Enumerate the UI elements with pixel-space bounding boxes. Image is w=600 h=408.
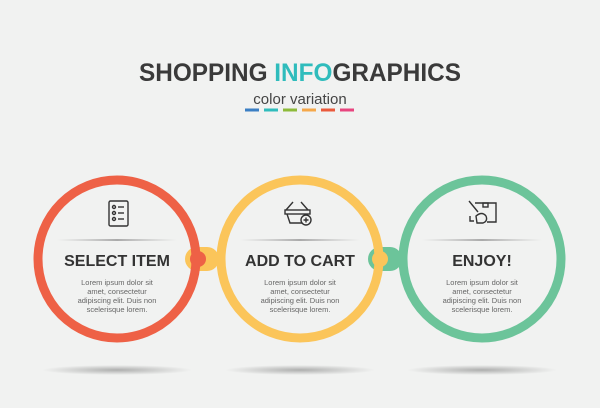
icon: list [109,201,128,226]
panel: add to cart: ADD TO CART [245,253,355,270]
panel: enjoy: adipiscing elit. Duis non [443,296,521,305]
connector: yellow-green [368,247,402,271]
connector: red-yellow [185,247,219,271]
panel: add to cart [221,180,379,338]
shadows [42,365,557,375]
panel: select item [38,180,196,338]
panel: select item: scelerisque lorem. [87,305,147,314]
panel: add to cart: scelerisque lorem. [270,305,330,314]
panel: add to cart: Lorem ipsum dolor sit [264,278,337,287]
panel: select item: adipiscing elit. Duis non [78,296,156,305]
icon: basket [285,202,311,225]
title: SHOPPING INFOGRAPHICS [139,59,461,87]
panel: select item: Lorem ipsum dolor sit [81,278,154,287]
panel: select item: SELECT ITEM [64,253,170,270]
panel: enjoy: scelerisque lorem. [452,305,512,314]
panel: select item: amet, consectetur [87,287,147,296]
panel: enjoy [403,180,561,338]
color dashes [245,108,354,112]
panel: enjoy: amet, consectetur [452,287,512,296]
panel: add to cart: adipiscing elit. Duis non [261,296,339,305]
panel: add to cart: amet, consectetur [270,287,330,296]
subtitle: color variation [253,91,347,108]
panel: enjoy: ENJOY! [452,253,512,270]
icon: box in hand [469,201,496,223]
panel: enjoy: Lorem ipsum dolor sit [446,278,519,287]
